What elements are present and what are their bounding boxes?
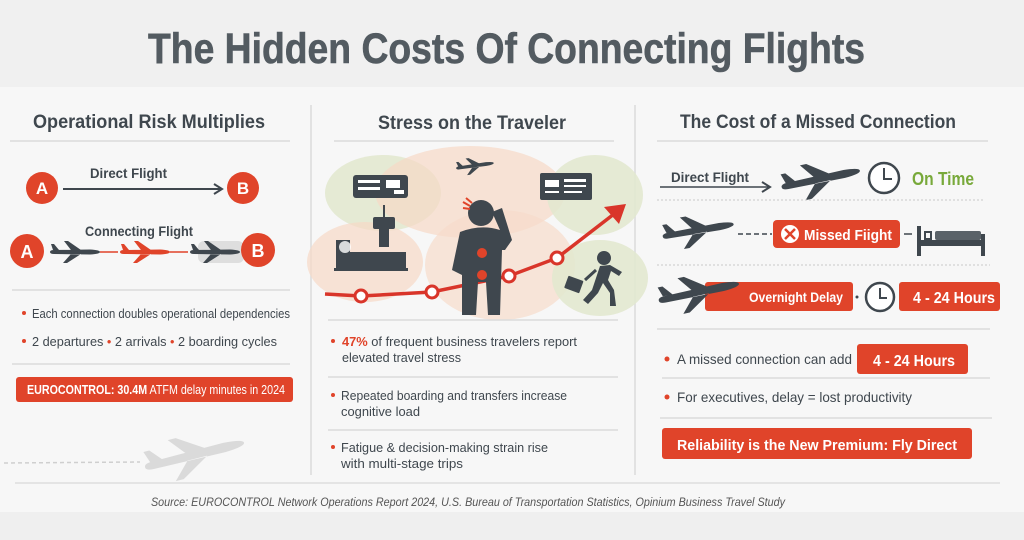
- bullets: [22, 306, 290, 349]
- bullets: stress: Repeated boarding and transfers increase: [341, 388, 567, 403]
- connecting flight diagram: Connecting Flight: [85, 223, 193, 239]
- illustration: stressed traveler: [307, 146, 648, 320]
- direct flight diagram: A: [36, 179, 48, 198]
- bullets: missed connection: 4 - 24 Hours: [873, 353, 955, 370]
- bullets: stress: with multi-stage trips: [340, 456, 464, 471]
- direct flight diagram: B: [237, 179, 249, 198]
- panel: stress: [307, 113, 648, 471]
- callout: fly direct: Reliability is the New Premium: Fly Direct: [677, 437, 957, 454]
- heading: stress: Stress on the Traveler: [378, 113, 567, 134]
- icon: running traveler: [564, 251, 622, 306]
- title: The Hidden Costs Of Connecting Flights: [148, 25, 865, 73]
- bullets: stress: cognitive load: [341, 404, 420, 419]
- connecting flight diagram: [10, 223, 275, 268]
- bullets: missed connection: A missed connection can add: [677, 351, 852, 367]
- bullets: missed connection: [662, 344, 990, 405]
- connecting flight diagram: A: [20, 242, 34, 262]
- icon: stressed person: [452, 198, 512, 315]
- source footnote: Source: EUROCONTROL Network Operations Report 2024, U.S. Bureau of Transportation Statistics, Opinium Business Travel Study: [151, 497, 786, 509]
- heading: operational risk: Operational Risk Multiplies: [33, 112, 265, 133]
- bullets: 2 departures • 2 arrivals • 2 boarding cycles: [32, 334, 277, 349]
- bullets: stress: Fatigue & decision-making strain rise: [341, 440, 548, 455]
- icon: boarding card: [540, 173, 592, 200]
- icon: faded plane: [4, 422, 249, 488]
- row: direct flight on time: [660, 153, 974, 204]
- red stress trend arrow: [325, 204, 626, 302]
- direct flight diagram: Direct Flight: [90, 165, 167, 181]
- panel: operational risk: [4, 112, 293, 488]
- heading: missed connection: The Cost of a Missed Connection: [680, 112, 956, 133]
- direct flight diagram: [26, 165, 259, 204]
- connecting flight diagram: B: [252, 241, 264, 261]
- icon: ticket: [353, 175, 408, 198]
- bullets: stress: elevated travel stress: [342, 350, 461, 365]
- bullets: Each connection doubles operational dependencies: [32, 306, 290, 321]
- row: overnight delay: 4 - 24 Hours: [913, 290, 995, 307]
- icon: bed: [917, 226, 985, 256]
- bullets: stress: 47% of frequent business travelers report: [342, 334, 577, 349]
- bullets: stress: [328, 334, 618, 471]
- row: direct flight on time: On Time: [912, 169, 974, 189]
- callout: fly direct: [662, 428, 972, 459]
- callout: eurocontrol: EUROCONTROL: 30.4M ATFM delay minutes in 2024: [27, 382, 285, 397]
- icon: plane: [455, 155, 495, 177]
- panel: missed connection: [655, 112, 1000, 459]
- row: missed flight: Missed Fiight: [804, 227, 892, 244]
- row: overnight delay: [655, 266, 1000, 318]
- bullets: missed connection: For executives, delay = lost productivity: [677, 389, 912, 405]
- icon: airport terminal: [334, 205, 408, 271]
- callout: eurocontrol: [16, 377, 293, 402]
- row: overnight delay: Overnight Delay: [749, 289, 843, 305]
- row: missed flight: [660, 208, 985, 256]
- row: direct flight on time: Direct Flight: [671, 169, 749, 185]
